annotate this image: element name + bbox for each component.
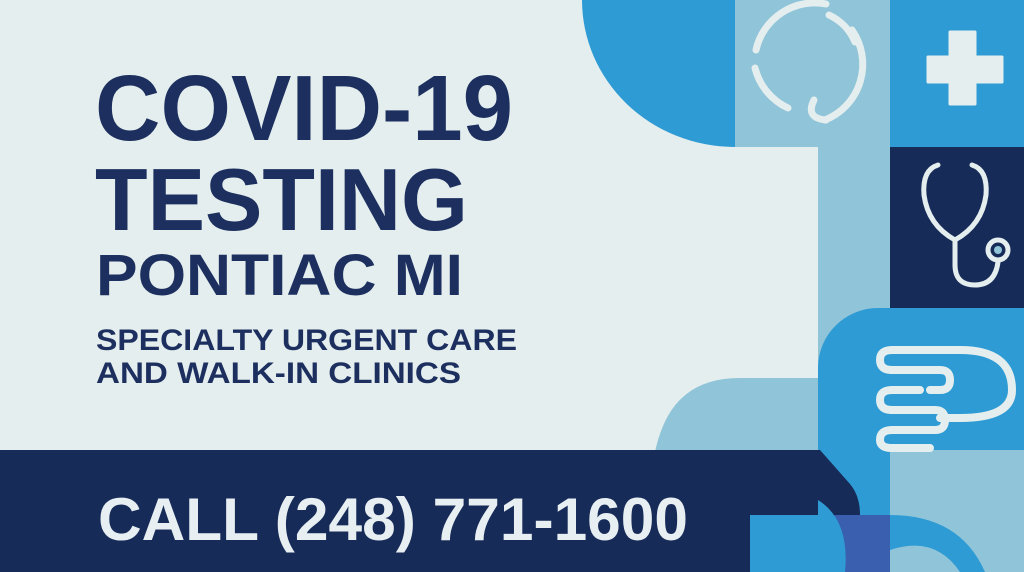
panel: navy stethoscope block [890, 147, 1024, 309]
panel: bottom right light block [890, 450, 1024, 572]
title: COVID-19: COVID-19 [95, 56, 513, 160]
panel: top right blue block [890, 0, 1024, 147]
panel: light blue column [735, 0, 890, 572]
subtitle [96, 324, 517, 390]
panel: navy call bar [0, 450, 860, 572]
icon: plus [928, 32, 1002, 104]
icon: ring [755, 3, 863, 120]
call to action: CALL (248) 771-1600 [98, 486, 688, 553]
panel: light blue bump [655, 378, 818, 452]
panel: blue rounded block [818, 308, 1024, 572]
icon: stethoscope [924, 165, 1008, 285]
subtitle: SPECIALTY URGENT CARE [96, 324, 517, 357]
icon: airflow lungs [880, 350, 1012, 448]
title: PONTIAC MI: PONTIAC MI [96, 243, 463, 308]
panel: bottom squares [750, 500, 985, 572]
panel: top quarter circle [582, 0, 735, 147]
subtitle: AND WALK-IN CLINICS [96, 357, 461, 390]
title: TESTING: TESTING [95, 150, 468, 249]
